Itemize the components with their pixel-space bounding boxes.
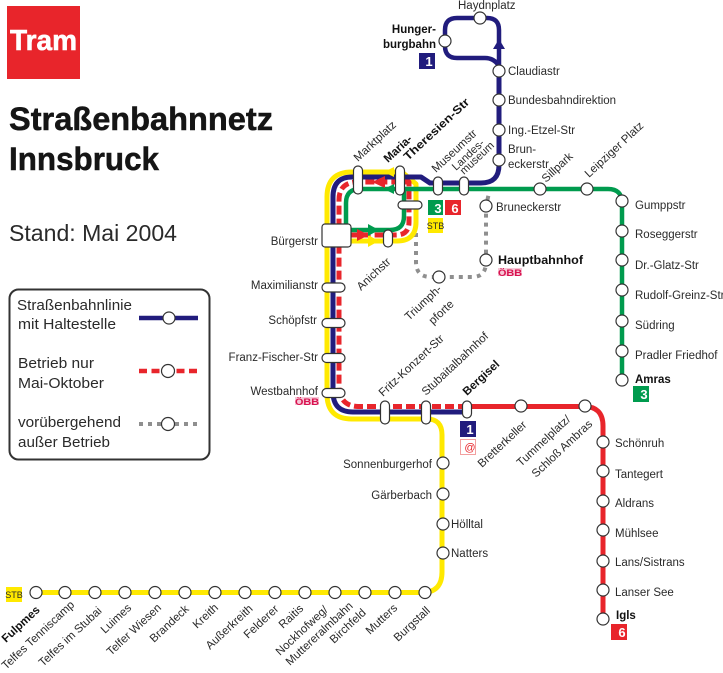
title: Straßenbahnnetz	[9, 101, 273, 137]
labels: diagonal station names on the Stubai line: Nockhofweg/	[274, 604, 331, 658]
labels: diagonal station names on the Stubai line: Mutters	[364, 602, 400, 637]
legend: out of service line: vorübergehend	[18, 415, 121, 431]
legend: seasonal line	[18, 356, 198, 392]
labels: horizontal station names: Westbahnhof	[250, 386, 319, 398]
labels: horizontal station names: Haydnplatz	[458, 0, 516, 12]
labels: diagonal station names in the centre: Sillpark	[540, 151, 576, 185]
labels: diagonal station names in the centre: Stubaitalbahnhof	[420, 330, 492, 398]
labels: horizontal station names: Rudolf-Greinz-Str	[635, 290, 723, 302]
line: Hungerburgbahn navy loop	[445, 18, 499, 71]
labels: horizontal station names: Schönruh	[615, 438, 664, 450]
labels: diagonal station names on the Stubai line: Raitis	[277, 603, 306, 631]
labels: horizontal station names: Roseggerstr	[635, 229, 698, 241]
labels: horizontal station names: burgbahn	[383, 39, 436, 51]
labels: horizontal station names	[229, 0, 723, 622]
badges: line numbers: STB	[427, 221, 444, 231]
labels: horizontal station names: Franz-Fischer-Str	[229, 352, 318, 364]
line 3 green	[346, 189, 622, 380]
labels: diagonal station names on the Stubai line: Kreith	[191, 602, 221, 631]
stops: circle stops	[30, 12, 628, 625]
labels: horizontal station names: Tantegert	[615, 469, 664, 481]
labels: horizontal station names: Hauptbahnhof	[498, 255, 583, 267]
labels: diagonal station names in the centre: Museumstr	[430, 128, 480, 175]
labels: diagonal station names in the centre: Leipziger Platz	[583, 120, 646, 180]
line 6 seasonal red dashed	[339, 182, 467, 406]
legend: tram line: mit Haltestelle	[18, 317, 116, 333]
date line: Stand: Mai 2004	[9, 220, 177, 246]
labels: horizontal station names: Aldrans	[615, 498, 654, 510]
labels: horizontal station names: Mühlsee	[615, 528, 658, 540]
labels: horizontal station names: Hunger-	[392, 24, 436, 36]
badges: line numbers: @	[464, 442, 476, 454]
legend: tram line: Straßenbahnlinie	[17, 298, 132, 314]
labels: diagonal station names in the centre: Theresien-Str	[402, 96, 473, 163]
labels: diagonal station names in the centre: Bretterkeller	[476, 419, 530, 470]
labels: horizontal station names: Lans/Sistrans	[615, 557, 685, 569]
labels: horizontal station names: Gumppstr	[635, 200, 686, 212]
line 1 navy	[333, 71, 499, 412]
labels: horizontal station names: Maximilianstr	[251, 280, 318, 292]
labels: diagonal station names in the centre: museum	[458, 140, 497, 177]
labels: horizontal station names: Claudiastr	[508, 66, 560, 78]
labels: diagonal station names on the Stubai line: Brandeck	[148, 603, 192, 645]
labels: horizontal station names: Pradler Friedhof	[635, 350, 718, 362]
legend: tram line	[17, 298, 198, 333]
badges: line numbers: 3	[640, 387, 648, 402]
icons: OBB rail logos	[295, 268, 522, 408]
labels: horizontal station names: eckerstr	[508, 159, 549, 171]
labels: diagonal station names in the centre: Triumph-	[403, 283, 445, 323]
badges: line numbers: 1	[466, 422, 474, 437]
labels: horizontal station names: Südring	[635, 320, 675, 332]
line 6 red solid	[467, 406, 603, 619]
labels: horizontal station names: Ing.-Etzel-Str	[508, 125, 575, 137]
labels: diagonal station names in the centre: Maria-	[382, 133, 415, 165]
title: Innsbruck	[9, 141, 159, 177]
labels: horizontal station names: Dr.-Glatz-Str	[635, 260, 699, 272]
labels: horizontal station names: Hölltal	[451, 519, 483, 531]
logo: Tram	[7, 6, 80, 79]
line: out of service (grey dotted)	[416, 193, 489, 277]
labels: horizontal station names: Brun-	[508, 144, 536, 156]
icons: OBB rail logos: ÖBB	[295, 397, 319, 408]
labels: horizontal station names: Bruneckerstr	[496, 202, 561, 214]
labels: diagonal station names on the Stubai line	[0, 599, 433, 672]
labels: horizontal station names: Amras	[635, 374, 671, 386]
labels: diagonal station names on the Stubai line: Birchfeld	[328, 607, 369, 646]
badges: line numbers: 6	[618, 625, 626, 640]
stops: pill and box stops	[322, 166, 472, 424]
arrows: loop direction	[357, 167, 394, 247]
title	[9, 101, 273, 177]
legend: out of service line: außer Betrieb	[18, 435, 110, 451]
legend: seasonal line: Betrieb nur	[18, 356, 94, 372]
badges: line numbers: 3	[434, 201, 442, 216]
labels: horizontal station names: Bürgerstr	[271, 236, 318, 248]
labels: diagonal station names in the centre: pforte	[427, 298, 457, 327]
legend: seasonal line: Mai-Oktober	[18, 376, 104, 392]
labels: horizontal station names: Sonnenburgerhof	[343, 459, 433, 471]
labels: horizontal station names: Bundesbahndirektion	[508, 95, 616, 107]
logo: Tram: Tram	[10, 25, 77, 57]
labels: diagonal station names on the Stubai line: Felderer	[242, 603, 281, 641]
labels: horizontal station names: Natters	[451, 548, 488, 560]
labels: diagonal station names on the Stubai line: Außerkreith	[204, 603, 256, 652]
labels: diagonal station names on the Stubai line: Luimes	[99, 602, 134, 636]
labels: diagonal station names in the centre: Tummelplatz/	[515, 413, 574, 469]
icons: OBB rail logos: ÖBB	[498, 268, 522, 279]
badges: line numbers: 1	[425, 54, 433, 69]
labels: diagonal station names in the centre: Marktplatz	[352, 119, 399, 164]
badges: line numbers	[5, 53, 649, 640]
labels: horizontal station names: Igls	[616, 610, 636, 622]
labels: diagonal station names on the Stubai line: Telfer Wiesen	[105, 602, 164, 658]
panel: legend	[10, 290, 210, 460]
legend: out of service line	[18, 415, 198, 451]
labels: diagonal station names on the Stubai line: Telfes Tenniscamp	[0, 599, 77, 672]
labels: diagonal station names in the centre: Fritz-Konzert-Str	[377, 333, 447, 399]
labels: diagonal station names in the centre: Schloß Ambras	[530, 418, 595, 480]
labels: horizontal station names: Gärberbach	[371, 490, 432, 502]
labels: diagonal station names in the centre: Anichstr	[355, 256, 394, 293]
labels: diagonal station names in the centre	[352, 96, 646, 480]
line: STB yellow	[36, 172, 442, 592]
badges: line numbers: 6	[451, 201, 459, 216]
arrow: Hungerburgbahn direction	[493, 39, 505, 49]
badges: line numbers: STB	[5, 590, 23, 600]
labels: diagonal station names in the centre: Landes-	[450, 137, 487, 173]
labels: diagonal station names on the Stubai line: Fulpmes	[0, 604, 43, 645]
labels: diagonal station names on the Stubai line: Muttereralmbahn	[284, 600, 356, 668]
labels: diagonal station names on the Stubai line: Burgstall	[392, 605, 433, 644]
labels: horizontal station names: Schöpfstr	[268, 315, 317, 327]
labels: diagonal station names on the Stubai line: Telfes im Stubai	[37, 605, 104, 669]
labels: horizontal station names: Lanser See	[615, 587, 674, 599]
labels: diagonal station names in the centre: Bergisel	[461, 358, 502, 398]
